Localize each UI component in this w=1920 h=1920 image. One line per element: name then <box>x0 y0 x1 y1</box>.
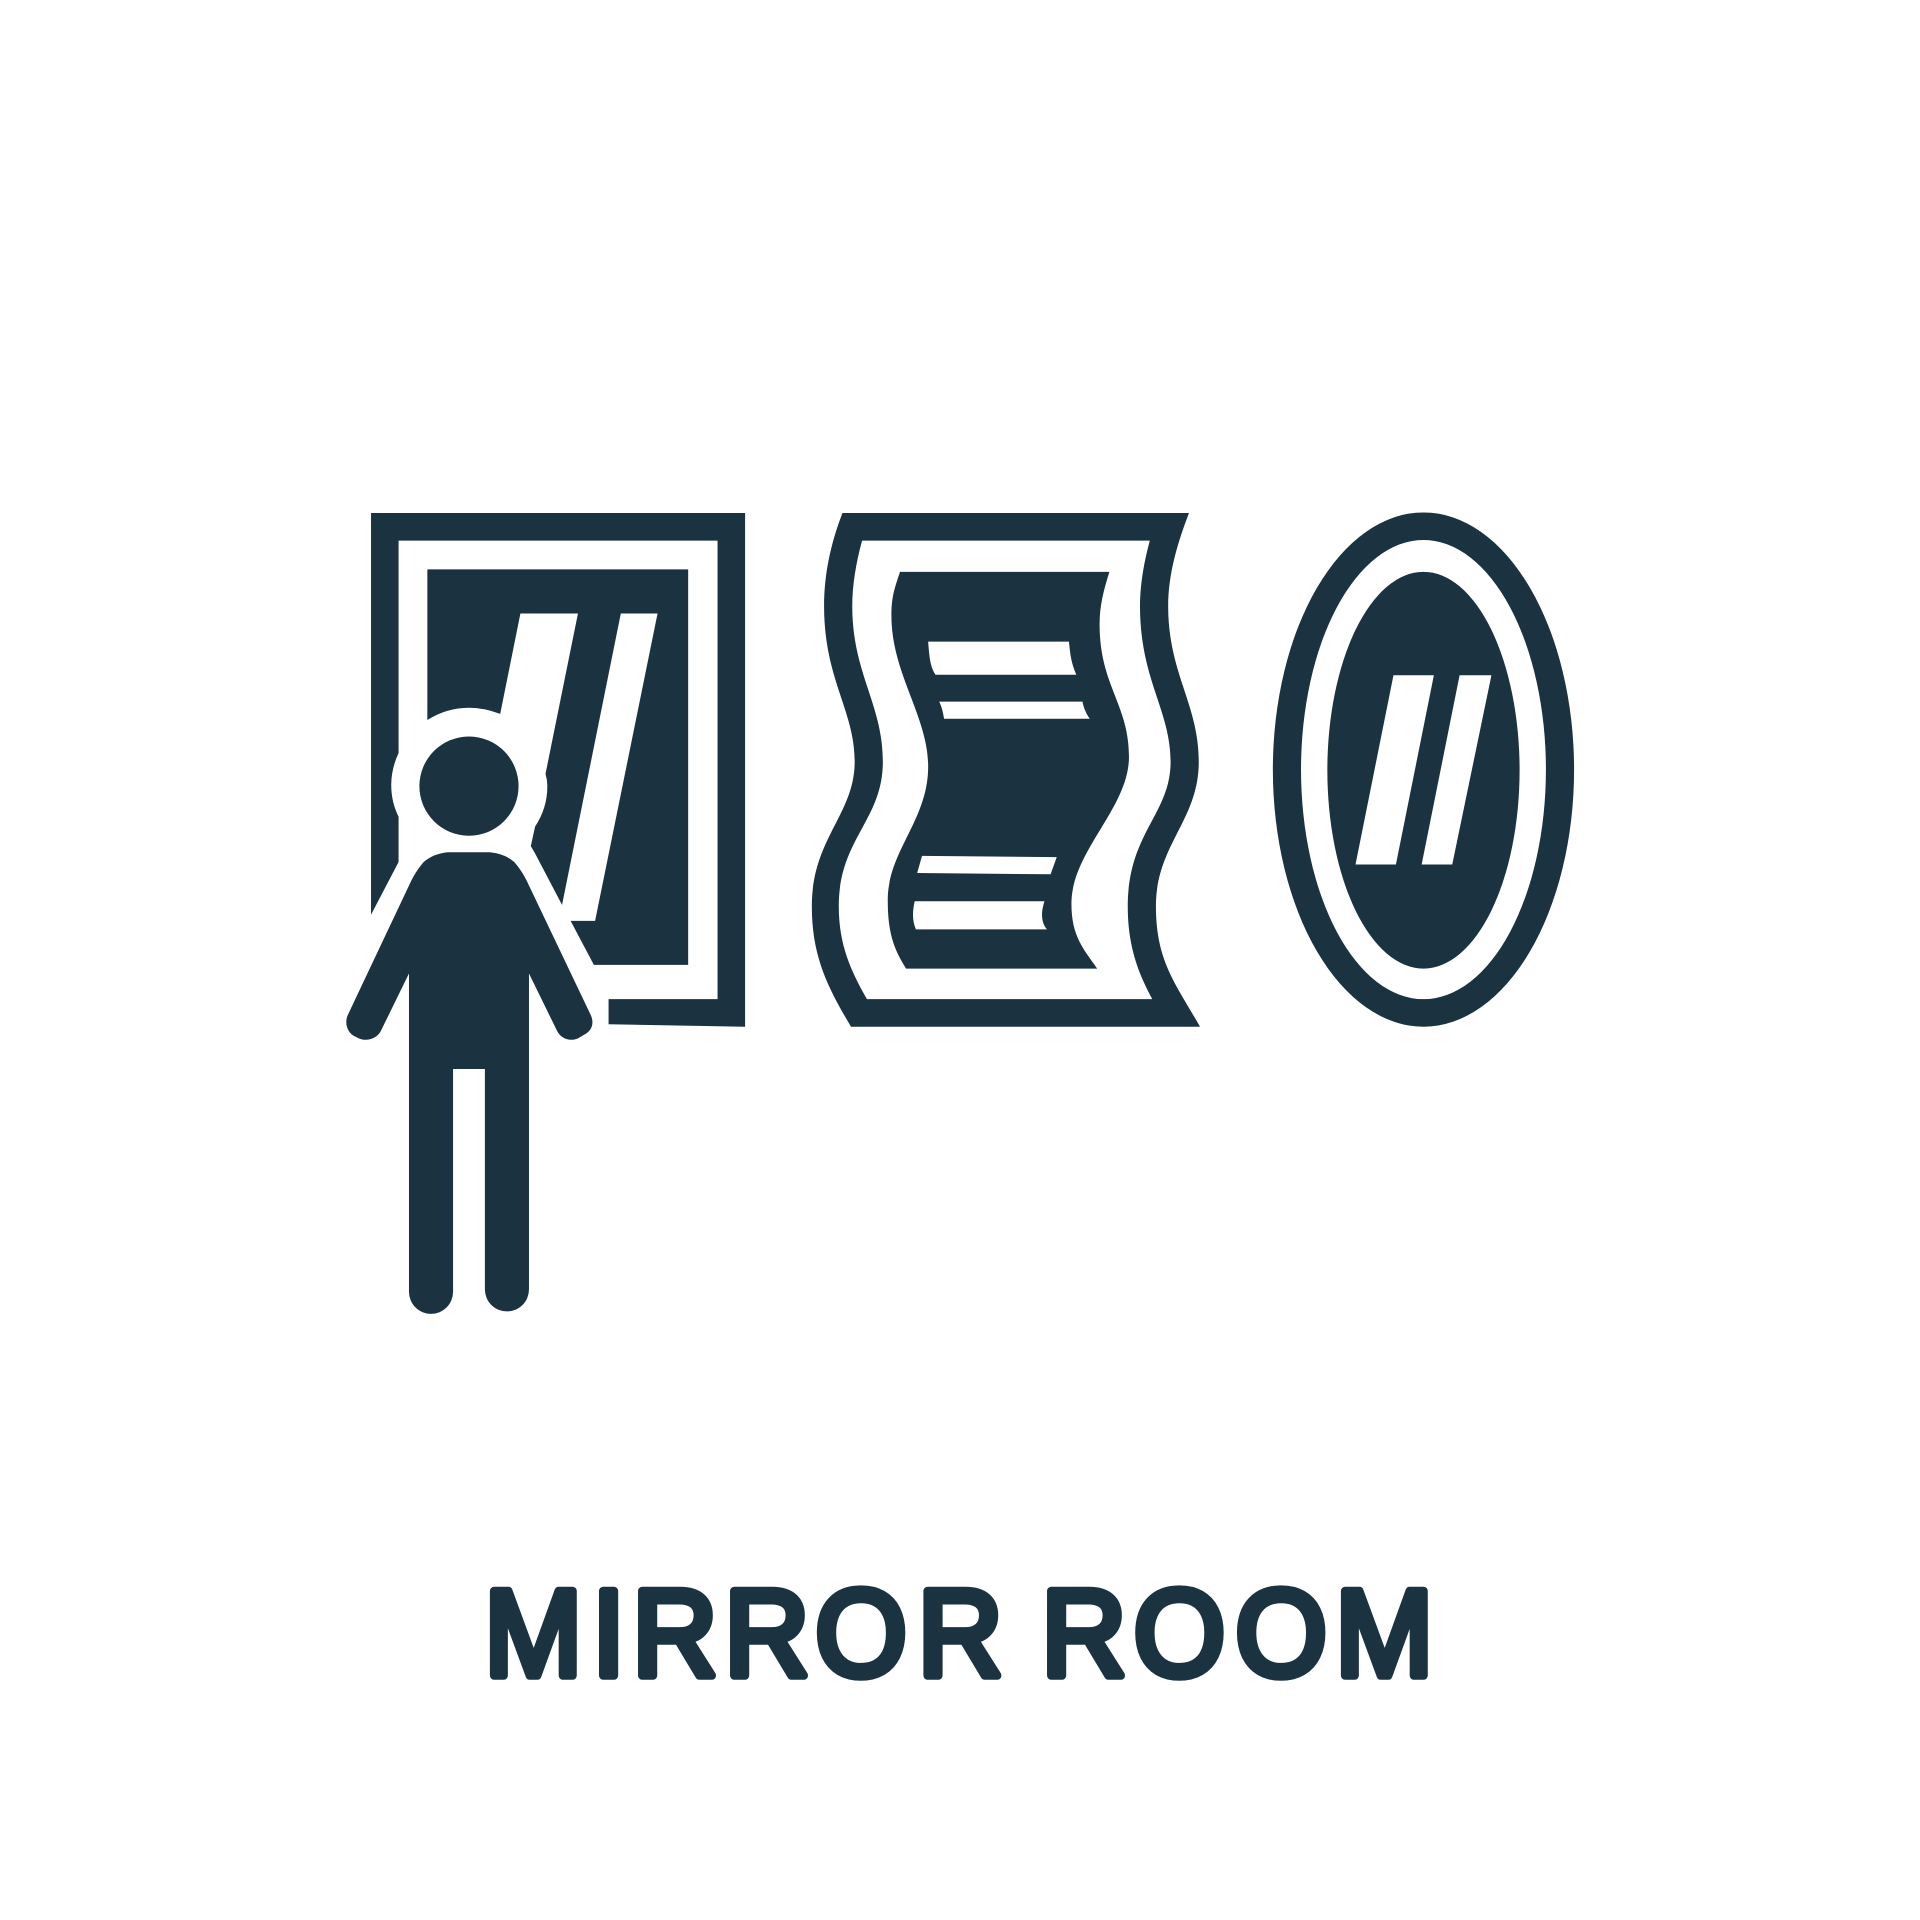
wavy mirror frame <box>812 513 1200 1027</box>
icon: oval mirror <box>1273 512 1574 1027</box>
icon: square mirror with person <box>346 513 745 1314</box>
person head <box>419 737 519 836</box>
wavy mirror glass <box>888 572 1129 969</box>
square mirror frame <box>371 513 745 1027</box>
oval mirror glass <box>1327 572 1520 969</box>
title: MIRROR ROOM <box>484 1566 1433 1702</box>
oval mirror frame <box>1273 512 1574 1027</box>
icon: wavy mirror <box>812 513 1200 1027</box>
person body <box>346 852 592 1314</box>
square mirror glass <box>427 569 688 965</box>
